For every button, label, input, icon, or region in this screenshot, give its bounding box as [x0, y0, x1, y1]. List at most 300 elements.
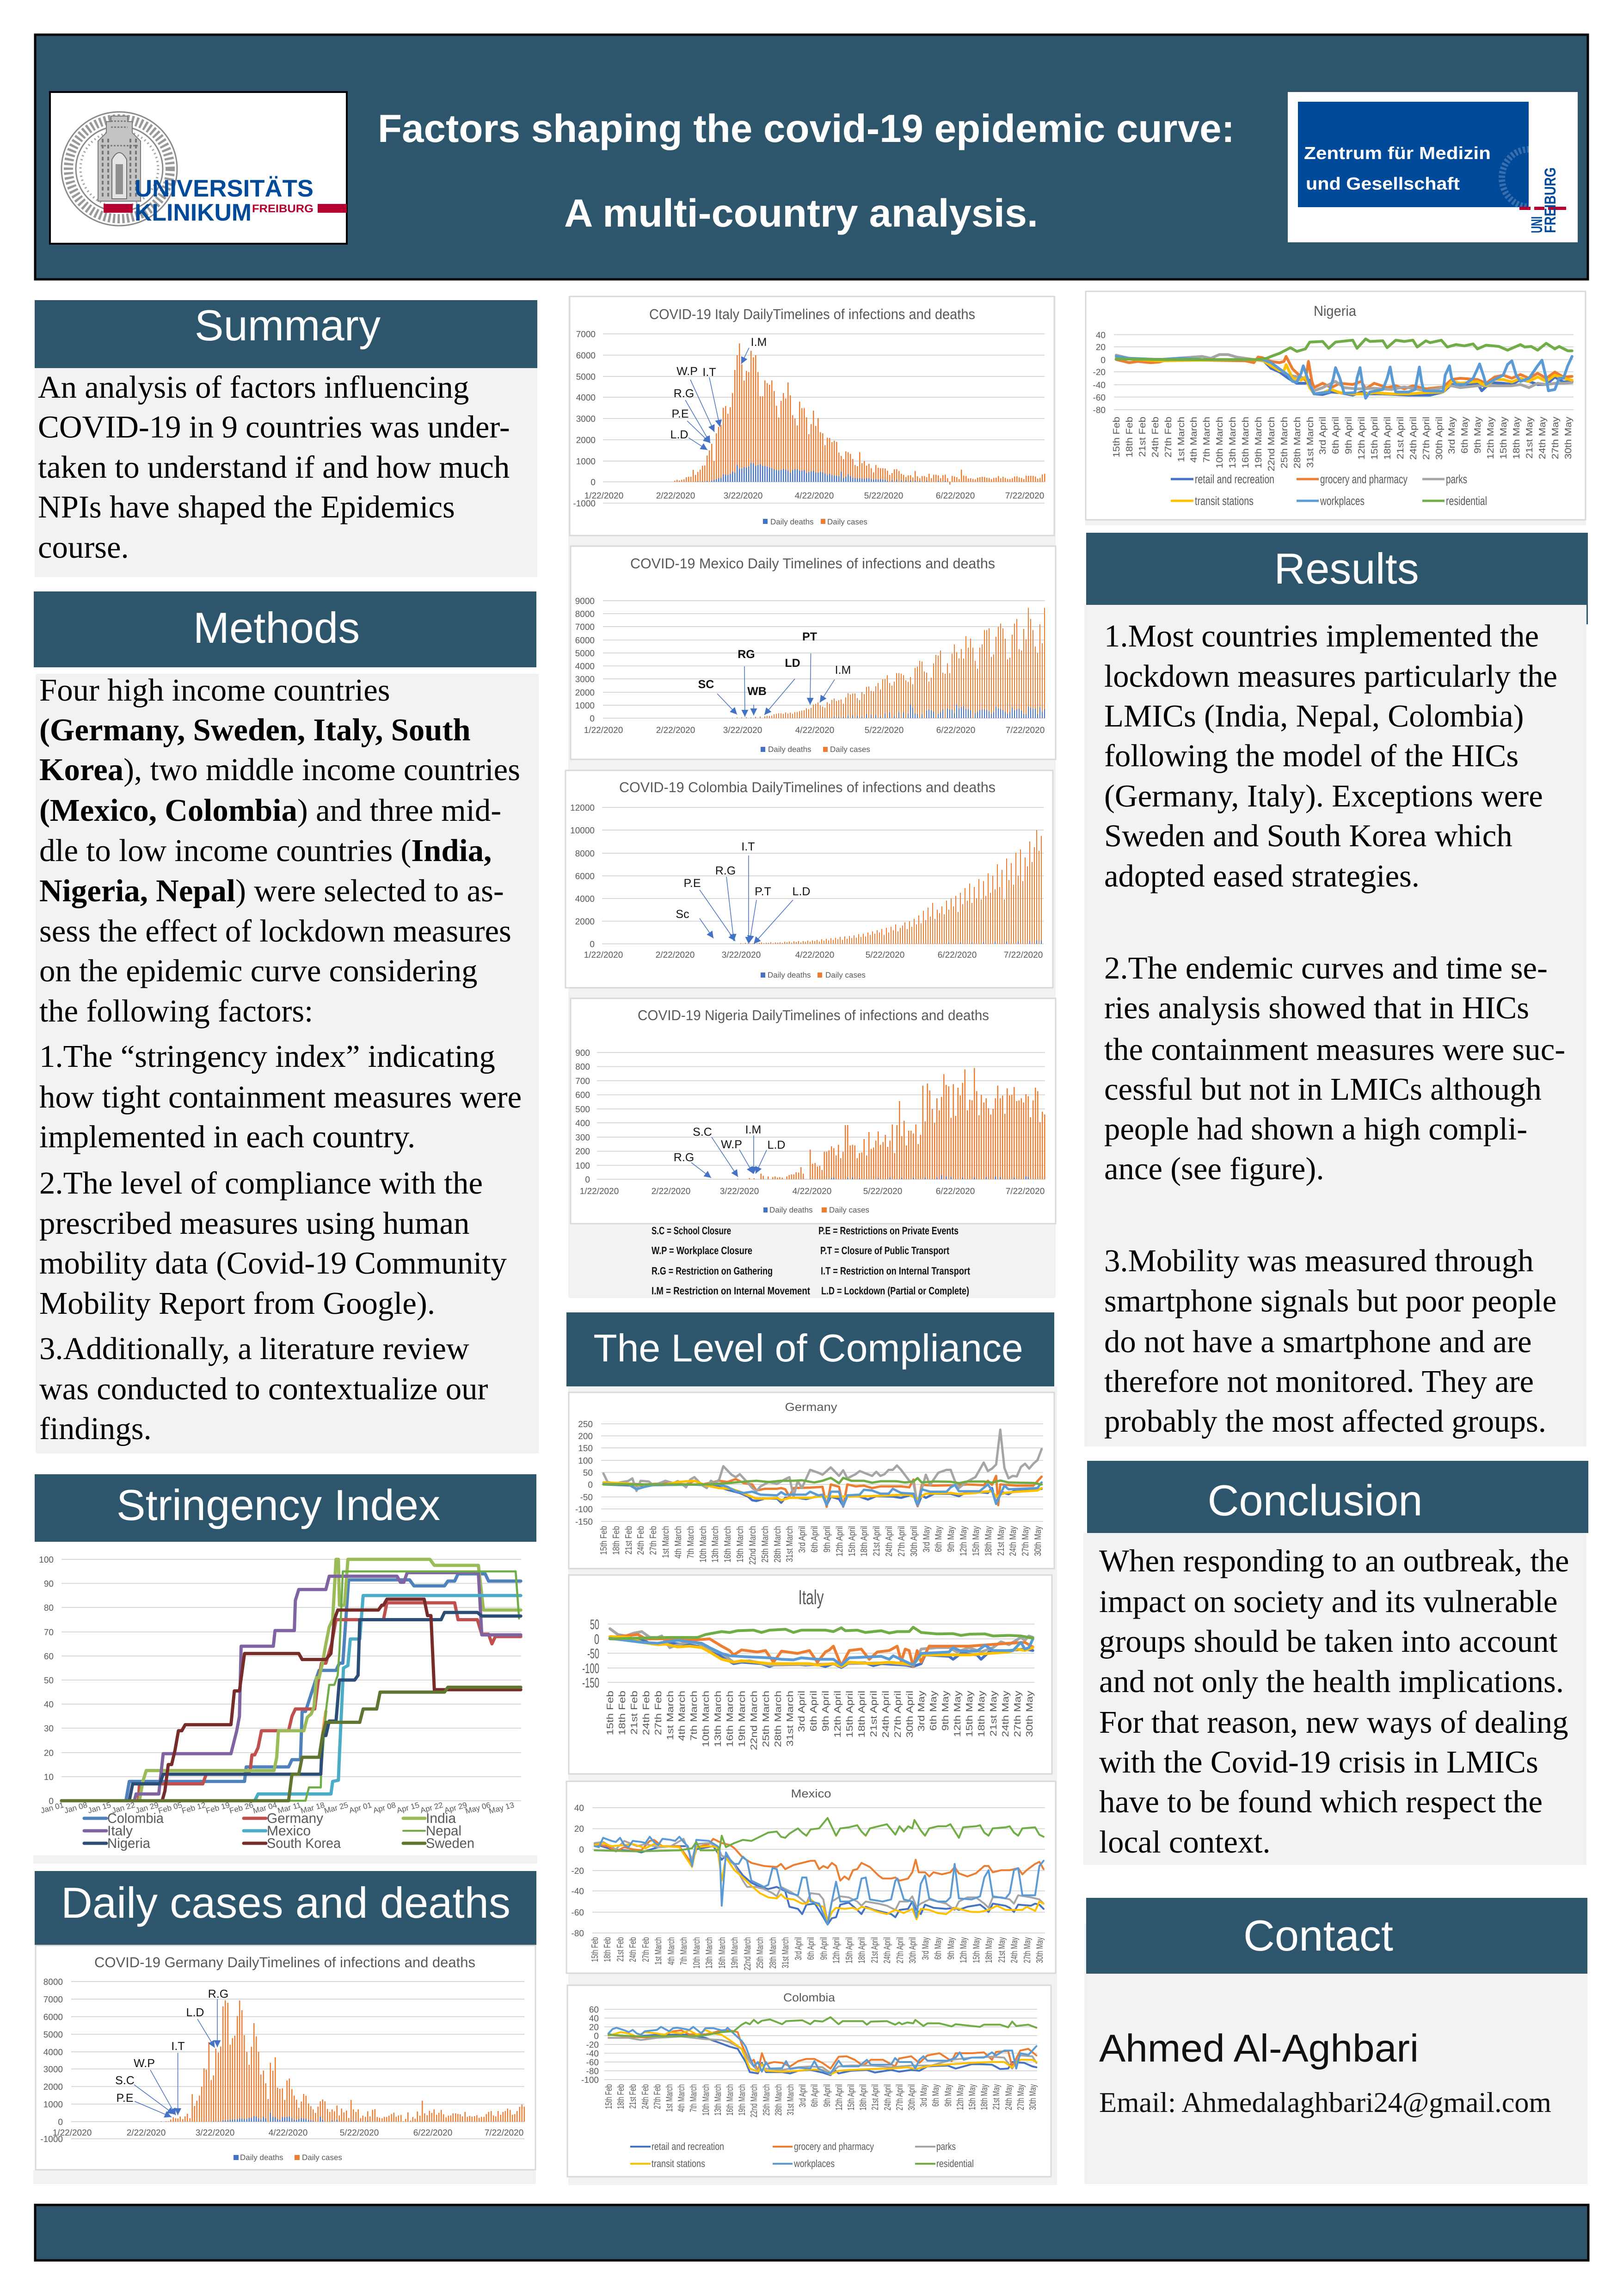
y axis labels: 40 — [574, 1804, 584, 1813]
x axis labels: 21st May — [996, 1526, 1006, 1556]
text block: methods: sess the effect of lockdown measures — [39, 913, 511, 948]
x axis labels: 9th April — [1344, 417, 1354, 454]
y axis labels: 0 — [588, 1480, 593, 1490]
axis labels: 6/22/2020 — [936, 1187, 975, 1196]
x axis labels: 7th March — [689, 2084, 699, 2112]
legend: intervention abbreviations: P.E = Restrictions on Private Events — [818, 1225, 959, 1237]
panel: daily cases and deaths — [33, 1871, 536, 2184]
arrows: intervention annotations: Sc — [676, 908, 689, 921]
axis labels: 4000 — [575, 662, 595, 671]
chart: Nigeria mobility — [1085, 291, 1586, 525]
y axis labels: 0 — [594, 2031, 599, 2041]
x axis labels: 22nd March — [749, 1691, 759, 1750]
x axis labels — [604, 2084, 1038, 2117]
legend: countries: Sweden — [426, 1836, 474, 1851]
axis labels: 6/22/2020 — [938, 950, 977, 960]
x axis labels: 31st March — [785, 1526, 795, 1562]
legend: mobility categories: grocery and pharmacy — [1320, 472, 1408, 486]
chart title: COVID-19 Nigeria DailyTimelines of infections and deaths — [638, 1007, 989, 1023]
x axis labels: 9th April — [819, 1937, 829, 1960]
x axis labels: 12th April — [835, 1526, 845, 1557]
y axis labels: -150 — [582, 1675, 599, 1691]
x axis labels: 9th April — [821, 1691, 831, 1731]
arrows: intervention annotations: L.D — [670, 428, 688, 441]
legend — [761, 971, 866, 979]
arrows: intervention annotations: S.C — [115, 2074, 135, 2087]
x axis labels: 21st Feb — [628, 2084, 638, 2109]
title: Factors shaping the covid-19 epidemic curve: — [378, 107, 1235, 151]
text block: results: probably the most affected groups. — [1104, 1403, 1546, 1439]
x axis labels: Feb 12 — [181, 1801, 207, 1816]
y axis labels: -50 — [580, 1493, 593, 1502]
bars: daily deaths — [698, 463, 945, 482]
x axis labels: 9th May — [941, 1691, 951, 1731]
x axis labels: Mar 04 — [252, 1801, 278, 1816]
x axis labels: 15th April — [846, 2084, 856, 2111]
axis labels: 0 — [590, 714, 595, 724]
x axis labels: 3rd May — [916, 1691, 927, 1731]
legend: countries: Germany — [267, 1811, 323, 1826]
x axis labels: 24th April — [884, 1526, 894, 1557]
x axis labels: 15th Feb — [604, 2084, 614, 2109]
legend: countries — [84, 1811, 474, 1851]
x axis labels: 25th March — [760, 1526, 770, 1563]
legend — [763, 1206, 869, 1214]
arrows: intervention annotations: L.D — [186, 2006, 204, 2019]
x axis labels: 21st Feb — [629, 1691, 639, 1735]
x axis labels: 19th March — [1254, 417, 1264, 468]
logo: Zentrum für Medizin und Gesellschaft: Zentrum für Medizin — [1304, 144, 1491, 163]
x axis labels: Jan 22 — [111, 1801, 136, 1815]
x axis labels: 27th May — [1021, 1526, 1031, 1556]
x axis labels: 30th April — [909, 1526, 919, 1557]
x axis labels: 19th March — [730, 1937, 740, 1969]
arrows: intervention annotations: R.G — [674, 387, 694, 400]
axis labels: 700 — [575, 1077, 590, 1086]
text block: results: (Germany, Italy). Exceptions were — [1104, 778, 1543, 813]
text block: summary — [38, 369, 510, 565]
arrows: intervention annotations — [674, 1123, 785, 1178]
chart: Mexico daily timeline — [571, 546, 1056, 759]
x axis labels: 24th April — [882, 1937, 892, 1964]
legend: intervention abbreviations: I.T = Restriction on Internal Transport — [821, 1265, 970, 1277]
contact email: Email: Ahmedalaghbari24@gmail.com — [1099, 2087, 1551, 2118]
text block: methods: Nigeria, Nepal) were selected to as- — [39, 873, 504, 909]
chart title: Colombia — [783, 1991, 835, 2004]
axis labels: 2000 — [575, 688, 595, 698]
y axis labels: 200 — [578, 1432, 593, 1441]
x axis labels: 6th May — [931, 2084, 941, 2106]
axis labels: 4/22/2020 — [795, 491, 834, 501]
y axis labels: -40 — [586, 2049, 599, 2059]
x axis labels: 10th March — [692, 1937, 702, 1969]
x axis labels: 24th April — [881, 1691, 891, 1738]
x axis labels: 6th April — [1331, 417, 1341, 454]
arrows: intervention annotations: SC — [698, 678, 714, 691]
x axis labels: 1st March — [661, 1526, 671, 1558]
axis labels: 5/22/2020 — [863, 1187, 902, 1196]
x axis labels: 7th March — [689, 1691, 699, 1741]
axis labels: 1/22/2020 — [580, 1187, 619, 1196]
x axis labels: 27th April — [895, 2084, 905, 2111]
legend: intervention abbreviations: I.M = Restriction on Internal Movement — [652, 1285, 810, 1297]
bars: daily cases — [738, 1068, 1045, 1179]
axis labels — [575, 597, 1045, 735]
x axis labels: 10th March — [701, 1691, 711, 1747]
arrows: intervention annotations — [698, 630, 851, 717]
axis labels: 5/22/2020 — [340, 2128, 379, 2138]
legend: countries: South Korea — [267, 1836, 341, 1851]
x axis labels: 30th May — [1035, 1937, 1045, 1963]
heading: contact: Contact — [1243, 1911, 1393, 1960]
x axis labels: 1st March — [664, 2084, 675, 2112]
x axis labels: 15th Feb — [605, 1691, 615, 1735]
x axis labels — [590, 1937, 1045, 1970]
arrows: intervention annotations — [676, 840, 810, 944]
bars: daily cases — [161, 2000, 524, 2122]
axis labels: 1000 — [43, 2100, 63, 2110]
chart title: Nigeria — [1314, 303, 1357, 319]
axis labels: 4/22/2020 — [795, 726, 834, 735]
line chart: mobility series — [595, 1818, 1044, 1925]
x axis labels: 21st Feb — [615, 1937, 626, 1962]
x axis labels: 27th Feb — [641, 1937, 651, 1962]
legend — [763, 517, 867, 526]
x axis labels: 27th April — [893, 1691, 903, 1738]
axis labels: 6/22/2020 — [936, 726, 975, 735]
x axis labels: 21st May — [989, 1691, 999, 1736]
text block: results: smartphone signals but poor people — [1104, 1283, 1556, 1318]
x axis labels: May 06 — [464, 1801, 492, 1816]
logo: Zentrum für Medizin und Gesellschaft — [1288, 92, 1578, 242]
text block: summary: NPIs have shaped the Epidemics — [38, 489, 455, 524]
x axis labels: 13th March — [713, 2084, 723, 2116]
x axis labels — [605, 1691, 1035, 1750]
legend: countries: Colombia — [107, 1811, 164, 1826]
x axis labels: 18th April — [1383, 417, 1393, 460]
x axis labels: 18th May — [984, 1526, 994, 1556]
x axis labels: 16th March — [1241, 417, 1251, 468]
x axis labels: Jan 15 — [87, 1801, 112, 1815]
text block: summary: An analysis of factors influencing — [38, 369, 469, 405]
x axis labels: 6th May — [928, 1691, 939, 1731]
axis labels: 6000 — [576, 351, 596, 361]
text block: methods — [39, 672, 522, 1446]
axis labels: 8000 — [575, 849, 595, 859]
axis labels: 7/22/2020 — [1004, 950, 1043, 960]
x axis labels: 6th May — [1460, 417, 1470, 454]
legend: Daily deaths — [768, 745, 812, 754]
axis labels: 8000 — [575, 609, 595, 619]
x axis labels: 18th May — [979, 2084, 990, 2110]
bars: daily cases — [732, 608, 1045, 718]
x axis labels: 4th March — [673, 1526, 683, 1558]
axis labels: 5000 — [43, 2030, 63, 2040]
text block: methods: how tight containment measures were — [39, 1079, 522, 1114]
arrows: intervention annotations: L.D — [793, 885, 810, 898]
x axis labels: Jan 29 — [135, 1801, 160, 1815]
axis labels: 7/22/2020 — [1005, 491, 1044, 501]
x axis labels: 15th May — [967, 2084, 977, 2110]
legend — [234, 2153, 342, 2162]
legend: mobility categories: transit stations — [1195, 494, 1254, 508]
logo: Zentrum für Medizin und Gesellschaft: FREIBURG — [1542, 167, 1559, 233]
legend: countries: Italy — [107, 1823, 133, 1839]
axis labels: 3/22/2020 — [720, 1187, 759, 1196]
x axis labels — [599, 1526, 1043, 1564]
x axis labels: Apr 22 — [419, 1801, 444, 1815]
text block: methods: implemented in each country. — [39, 1119, 415, 1154]
x axis labels: 18th April — [859, 1526, 869, 1557]
legend: mobility categories: grocery and pharmacy — [794, 2141, 874, 2152]
heading: the level of compliance: The Level of Compliance — [593, 1326, 1023, 1370]
text block: results: people had shown a high compli- — [1104, 1111, 1527, 1146]
x axis labels: 15th May — [965, 1691, 975, 1737]
text block: summary: COVID-19 in 9 countries was under- — [38, 409, 510, 444]
axis labels: 0 — [590, 940, 595, 949]
axis labels: 7000 — [43, 1995, 63, 2005]
x axis labels: 7th March — [679, 1937, 689, 1965]
text block: conclusion: local context. — [1099, 1824, 1271, 1859]
axis labels: 7/22/2020 — [1006, 1187, 1045, 1196]
legend: mobility categories: residential — [1446, 494, 1487, 508]
panel: results — [1084, 533, 1588, 1447]
axis labels: 3/22/2020 — [722, 950, 761, 960]
x axis labels: 25th March — [761, 1691, 771, 1747]
arrows: intervention annotations: W.P — [134, 2057, 155, 2070]
heading: stringency index: Stringency Index — [117, 1481, 440, 1529]
title — [378, 107, 1235, 235]
x axis labels: 24th Feb — [641, 1691, 652, 1735]
text block: results: ance (see figure). — [1104, 1151, 1324, 1186]
x axis labels: 19th March — [737, 2084, 747, 2116]
x axis labels: 28th March — [773, 1526, 783, 1563]
y axis labels — [39, 1555, 54, 1806]
axis labels: 2/22/2020 — [127, 2128, 166, 2138]
x axis labels: 24th April — [883, 2084, 893, 2111]
legend: intervention abbreviations: W.P = Workplace Closure — [652, 1244, 752, 1256]
x axis labels — [40, 1801, 515, 1816]
y axis labels: 40 — [1096, 331, 1106, 340]
line chart: mobility series — [609, 2017, 1036, 2075]
text block: results — [1104, 618, 1565, 1439]
y axis labels: 20 — [44, 1748, 54, 1758]
panel: stringency index — [33, 1474, 537, 1864]
x axis labels: 16th March — [717, 1937, 727, 1969]
text block: methods: prescribed measures using human — [39, 1206, 469, 1241]
panel: contact — [1084, 1898, 1587, 2184]
x axis labels: 1st March — [1176, 417, 1187, 462]
y axis labels: 100 — [578, 1456, 593, 1466]
axis labels: 3/22/2020 — [196, 2128, 234, 2138]
x axis labels: Apr 01 — [348, 1801, 373, 1815]
axis labels: 1/22/2020 — [584, 491, 623, 501]
y axis labels: -80 — [1093, 406, 1106, 415]
text block: results: cessful but not in LMICs although — [1104, 1071, 1542, 1107]
x axis labels — [1112, 417, 1574, 471]
axis labels: 2000 — [576, 436, 596, 445]
y axis labels: 0 — [49, 1797, 54, 1806]
axis labels: 5000 — [576, 372, 596, 382]
x axis labels: 21st Feb — [1137, 417, 1148, 457]
y axis labels: -80 — [572, 1929, 584, 1939]
chart: Germany mobility — [569, 1392, 1054, 1569]
x axis labels: 28th March — [1292, 417, 1303, 468]
x axis labels: 27th Feb — [652, 2084, 663, 2109]
x axis labels: 30th May — [1028, 2084, 1038, 2110]
x axis labels: 30th May — [1033, 1526, 1043, 1556]
x axis labels: 24th May — [1004, 2084, 1014, 2110]
line chart: stringency index by country — [61, 1559, 521, 1801]
text block: results: the containment measures were suc- — [1104, 1032, 1565, 1067]
arrows: intervention annotations: LD — [785, 657, 800, 670]
arrows: intervention annotations — [670, 336, 767, 450]
bars: daily deaths — [949, 941, 1041, 944]
text block: results: therefore not monitored. They are — [1104, 1364, 1534, 1399]
x axis labels: 3rd April — [798, 2084, 808, 2107]
chart title: Mexico — [791, 1787, 831, 1800]
axis labels — [573, 330, 1044, 509]
x axis labels: 3rd April — [797, 1526, 807, 1553]
y axis labels: 70 — [44, 1628, 54, 1637]
legend: mobility categories: transit stations — [652, 2158, 705, 2169]
y axis labels: 50 — [583, 1468, 593, 1478]
axis labels: 900 — [575, 1048, 590, 1058]
x axis labels: 10th March — [1215, 417, 1225, 468]
x axis labels: 6th April — [810, 1526, 820, 1552]
x axis labels: 4th March — [677, 1691, 687, 1741]
arrows: intervention annotations: PT — [802, 630, 817, 643]
text block: conclusion: and not only the health implications. — [1099, 1664, 1564, 1699]
axis labels: 12000 — [570, 803, 595, 813]
x axis labels: 9th May — [1473, 417, 1483, 454]
y axis labels: -20 — [572, 1866, 584, 1876]
axis labels: 4000 — [575, 894, 595, 904]
x axis labels: 25th March — [762, 2084, 772, 2116]
text block: results: LMICs (India, Nepal, Colombia) — [1104, 698, 1524, 733]
text block: methods: 1.The “stringency index” indicating — [39, 1039, 495, 1074]
x axis labels: 16th March — [723, 1526, 733, 1563]
text block: conclusion: For that reason, new ways of dealing — [1099, 1705, 1568, 1740]
text block: results: Sweden and South Korea which — [1104, 818, 1512, 853]
bars: daily cases — [675, 344, 1045, 485]
arrows: intervention annotations: S.C — [693, 1126, 712, 1139]
x axis labels: 24th May — [1009, 1937, 1020, 1963]
axis labels: 2000 — [43, 2082, 63, 2092]
y axis labels — [1093, 331, 1106, 415]
chart: Nigeria daily timeline — [571, 998, 1056, 1224]
x axis labels: 10th March — [698, 1526, 708, 1563]
x axis labels: 24th Feb — [1150, 417, 1161, 457]
x axis labels: 16th March — [725, 1691, 735, 1747]
axis labels: 3000 — [575, 675, 595, 684]
x axis labels: 22nd March — [748, 1526, 758, 1564]
x axis labels: 13th March — [710, 1526, 720, 1563]
x axis labels: 15th Feb — [1112, 417, 1122, 457]
x axis labels: 31st March — [781, 1937, 791, 1968]
y axis labels — [581, 2005, 599, 2085]
x axis labels: 18th April — [857, 1691, 867, 1738]
legend: mobility categories: residential — [936, 2158, 974, 2169]
x axis labels: 15th Feb — [590, 1937, 600, 1962]
text block: conclusion — [1099, 1543, 1569, 1859]
line chart: mobility series — [603, 1430, 1042, 1507]
x axis labels: 3rd May — [921, 1937, 931, 1960]
y axis labels: 250 — [578, 1420, 593, 1429]
line chart: mobility series — [610, 1627, 1033, 1668]
y axis labels: -40 — [1093, 381, 1106, 390]
arrows: intervention annotations: P.E — [671, 407, 689, 420]
legend: countries: Mexico — [267, 1823, 311, 1839]
x axis labels: 6th April — [806, 1937, 816, 1960]
x axis labels: 31st March — [1305, 417, 1316, 468]
text block: conclusion: with the Covid-19 crisis in LMICs — [1099, 1744, 1538, 1779]
x axis labels: 24th April — [1408, 417, 1419, 460]
x axis labels: 15th May — [971, 1526, 981, 1556]
legend: Daily cases — [827, 517, 867, 526]
x axis labels: 12th May — [953, 1691, 963, 1737]
axis labels: 9000 — [575, 597, 595, 606]
x axis labels: 30th April — [905, 1691, 915, 1738]
axis labels: 6000 — [575, 636, 595, 646]
x axis labels: 24th Feb — [640, 2084, 651, 2109]
legend: Daily cases — [302, 2153, 342, 2162]
y axis labels: -60 — [586, 2058, 599, 2068]
axis labels: 100 — [575, 1161, 590, 1171]
y axis labels: 20 — [589, 2023, 599, 2032]
logo: Universitätsklinikum Freiburg: FREIBURG — [252, 203, 314, 215]
x axis labels: 15th Feb — [599, 1526, 609, 1555]
axis labels: 6/22/2020 — [413, 2128, 452, 2138]
text block: methods: on the epidemic curve considering — [39, 953, 478, 988]
axis labels: 2/22/2020 — [656, 491, 695, 501]
x axis labels: Jan 01 — [40, 1801, 65, 1815]
x axis labels: Feb 26 — [228, 1801, 254, 1816]
text block: results: ries analysis showed that in HICs — [1104, 990, 1529, 1025]
logo: Universitätsklinikum Freiburg: UNIVERSITÄTS — [135, 175, 314, 202]
text block: methods: 3.Additionally, a literature review — [39, 1331, 469, 1366]
axis labels: 4/22/2020 — [269, 2128, 307, 2138]
x axis labels: 12th April — [1357, 417, 1367, 460]
chart title: COVID-19 Germany DailyTimelines of infections and deaths — [94, 1954, 475, 1970]
axis labels — [40, 1977, 523, 2144]
x axis labels: 15th April — [844, 1937, 855, 1964]
axis labels: 7/22/2020 — [485, 2128, 523, 2138]
heading: results: Results — [1274, 544, 1419, 593]
axis labels: 0 — [58, 2117, 63, 2127]
logo: Zentrum für Medizin und Gesellschaft: UNI — [1528, 216, 1546, 233]
legend: mobility categories: workplaces — [793, 2158, 835, 2169]
axis labels: 3000 — [576, 414, 596, 424]
legend: mobility categories — [1171, 472, 1487, 508]
arrows: intervention annotations: I.T — [702, 366, 716, 379]
x axis labels: 6th May — [934, 1526, 944, 1552]
chart: Italy daily timeline — [570, 296, 1054, 536]
legend: Daily deaths — [240, 2153, 283, 2162]
y axis labels: -150 — [575, 1517, 593, 1527]
text block: results: 2.The endemic curves and time se- — [1104, 950, 1548, 985]
axis labels: 0 — [585, 1175, 590, 1185]
y axis labels: 50 — [590, 1617, 599, 1632]
axis labels: 3/22/2020 — [724, 491, 762, 501]
arrows: intervention annotations: I.M — [751, 336, 767, 349]
x axis labels: 9th May — [946, 1526, 956, 1552]
title: A multi-country analysis. — [564, 191, 1038, 235]
axis labels: 0 — [590, 478, 596, 487]
y axis labels: 20 — [574, 1824, 584, 1834]
axis labels: 5/22/2020 — [864, 491, 903, 501]
x axis labels: 18th Feb — [602, 1937, 613, 1962]
